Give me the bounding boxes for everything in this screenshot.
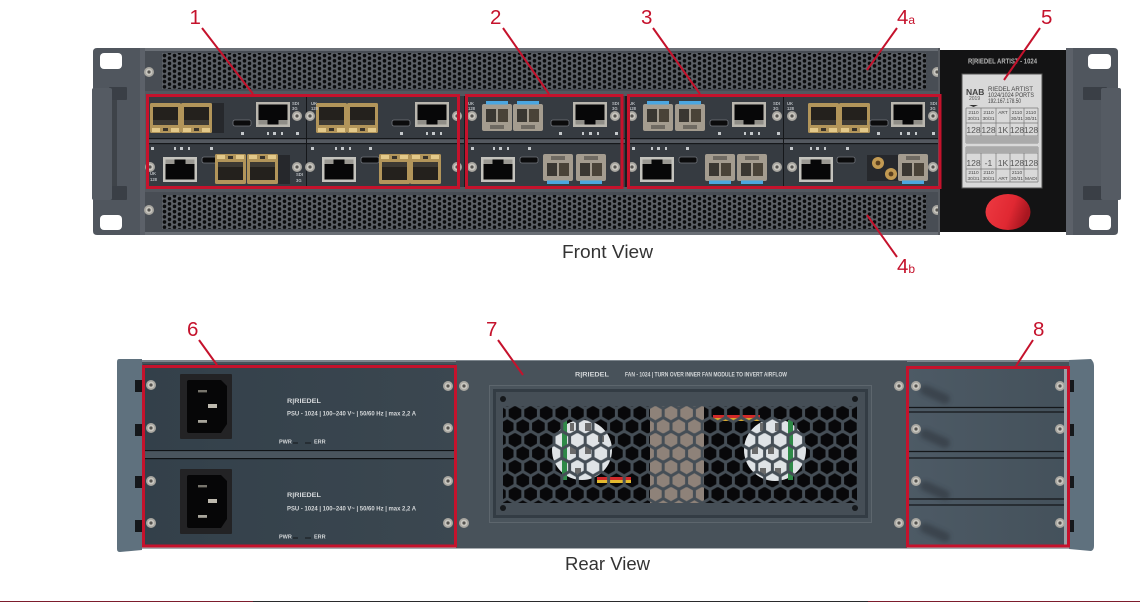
PSU 2 labels bbox=[279, 492, 416, 540]
number 1 with leader: 1 bbox=[190, 6, 201, 29]
number 6 with leader bbox=[187, 318, 217, 365]
e-paper screen: NAB bbox=[966, 87, 984, 97]
e-paper screen: 128 bbox=[966, 158, 981, 168]
bottom edge rule bbox=[0, 601, 1140, 602]
module 2: fibre LC modules: UK bbox=[468, 101, 474, 106]
e-paper screen: ART bbox=[998, 176, 1008, 182]
PSU 2 labels: PSU - 1024 | 100–240 V~ | 50/60 Hz | max 2,2 A bbox=[287, 506, 416, 512]
e-paper screen: 128 bbox=[966, 125, 981, 135]
right fan bbox=[713, 415, 806, 481]
right rack bracket bbox=[1066, 48, 1121, 235]
number 3 with leader bbox=[641, 6, 700, 94]
module 3: fibre and mixed modules bbox=[627, 101, 938, 184]
number 4a with leader bbox=[867, 6, 915, 70]
e-paper screen: 30/31 bbox=[982, 116, 995, 122]
rear view chassis bbox=[117, 359, 1094, 552]
module 3: fibre and mixed modules: 3G bbox=[930, 106, 936, 111]
number 7 with leader: 7 bbox=[486, 318, 497, 341]
number 4b with leader: 4b bbox=[897, 255, 915, 278]
red box: callout 3 bbox=[628, 96, 940, 188]
e-paper screen: 128 bbox=[1024, 125, 1038, 135]
module bay bbox=[145, 91, 940, 192]
e-paper screen: 128 bbox=[1010, 125, 1024, 135]
top ventilation grille bbox=[162, 53, 926, 89]
status LEDs bbox=[151, 132, 935, 150]
rear body bbox=[142, 360, 1069, 548]
caption: rear view: Rear View bbox=[565, 553, 651, 574]
fan panel bbox=[456, 361, 907, 548]
e-paper screen: MADI bbox=[1025, 176, 1037, 182]
left rear bracket bbox=[117, 359, 142, 552]
e-paper screen: 2110 bbox=[983, 110, 994, 116]
e-paper screen: 2019 bbox=[969, 96, 980, 102]
module 1: gold SFP modules: 3G bbox=[292, 106, 298, 111]
e-paper screen: 2110 bbox=[1012, 170, 1022, 176]
module 1: gold SFP modules bbox=[145, 101, 462, 184]
PSU 1 labels: R|RIEDEL bbox=[287, 398, 321, 405]
power inlet bottom bbox=[180, 469, 232, 534]
PSU 1 labels: PWR bbox=[279, 440, 292, 446]
number 5 with leader: 5 bbox=[1041, 6, 1052, 29]
PSU 2 labels: ERR bbox=[314, 534, 326, 540]
e-paper screen bbox=[962, 74, 1042, 188]
right rear bracket bbox=[1069, 359, 1094, 551]
number 6 with leader: 6 bbox=[187, 318, 198, 341]
e-paper screen: 1K bbox=[998, 125, 1009, 135]
number 7 with leader bbox=[486, 318, 523, 375]
PSU 1 labels: ERR bbox=[314, 440, 326, 446]
module 2: fibre LC modules: SDI bbox=[612, 101, 619, 106]
e-paper screen: 192.167.178.50 bbox=[988, 99, 1022, 105]
module 3: fibre and mixed modules: 128 bbox=[629, 106, 637, 111]
blank slot covers bbox=[908, 366, 1067, 547]
number 8 with leader: 8 bbox=[1033, 318, 1044, 341]
chassis screws bbox=[144, 67, 942, 215]
e-paper screen: 2110 bbox=[968, 110, 979, 116]
number 5 with leader bbox=[1004, 6, 1052, 80]
fan grille with fans bbox=[500, 404, 860, 505]
number 4a with leader: 4a bbox=[897, 6, 915, 29]
e-paper screen: ART bbox=[998, 110, 1008, 116]
e-paper screen: 30/31 bbox=[967, 116, 980, 122]
e-paper screen: 128 bbox=[1024, 158, 1038, 168]
e-paper screen: 1K bbox=[998, 158, 1009, 168]
fan label: FAN - 1024 | TURN OVER INNER FAN MODULE TO INVERT AIRFLOW bbox=[625, 372, 788, 378]
module 1: gold SFP modules: UK bbox=[150, 171, 156, 176]
caption: front view: Front View bbox=[562, 241, 654, 262]
number 3 with leader: 3 bbox=[641, 6, 652, 29]
red knob bbox=[986, 194, 1030, 230]
number 1 with leader bbox=[190, 6, 253, 94]
front view chassis bbox=[92, 48, 1121, 235]
e-paper screen: 2110 bbox=[1012, 110, 1022, 116]
fan label bbox=[575, 372, 788, 378]
e-paper screen: RIEDEL ARTIST bbox=[988, 87, 1033, 93]
red box: callout 1 bbox=[148, 96, 458, 188]
e-paper screen: 30/31 bbox=[1011, 116, 1023, 122]
left fan bbox=[552, 420, 631, 483]
module 1: gold SFP modules: SDI bbox=[292, 101, 299, 106]
e-paper screen: 30/31 bbox=[1011, 176, 1023, 182]
e-paper screen: 30/31 bbox=[967, 176, 980, 182]
PSU 1 labels bbox=[279, 398, 416, 446]
module 3: fibre and mixed modules: SDI bbox=[773, 101, 780, 106]
module 1: gold SFP modules: SDI bbox=[296, 172, 303, 177]
red box: callout 2 bbox=[466, 96, 622, 188]
module 3: fibre and mixed modules: 3G bbox=[773, 106, 779, 111]
power supply panels bbox=[143, 364, 456, 547]
left rack bracket bbox=[92, 48, 146, 235]
number 2 with leader bbox=[490, 6, 549, 94]
e-paper screen: 2110 bbox=[968, 170, 979, 176]
module 1: gold SFP modules: 128 bbox=[311, 106, 319, 111]
e-paper screen: 2110 bbox=[1026, 110, 1036, 116]
e-paper screen: 2110 bbox=[983, 170, 994, 176]
module 1: gold SFP modules: 3G bbox=[296, 178, 302, 183]
PSU 1 labels: PSU - 1024 | 100–240 V~ | 50/60 Hz | max 2,2 A bbox=[287, 410, 416, 418]
module 3: fibre and mixed modules: UK bbox=[787, 101, 793, 106]
e-paper screen: 30/31 bbox=[982, 176, 995, 182]
module 1: gold SFP modules: UK bbox=[311, 101, 317, 106]
red box: callout 8 bbox=[908, 368, 1068, 546]
PSU 2 labels: PWR bbox=[279, 534, 292, 540]
red box: callout 6 bbox=[144, 366, 456, 546]
PSU 2 labels: R|RIEDEL bbox=[287, 492, 321, 499]
bottom ventilation grille bbox=[162, 195, 926, 229]
e-paper screen: 30/31 bbox=[1025, 116, 1037, 122]
number 2 with leader: 2 bbox=[490, 6, 501, 29]
module 2: fibre LC modules: 128 bbox=[468, 106, 476, 111]
module 2: fibre LC modules: 3G bbox=[612, 106, 618, 111]
number 4b with leader bbox=[867, 215, 915, 278]
module 2: fibre LC modules bbox=[467, 101, 620, 184]
e-paper screen: 1024/1024 PORTS bbox=[988, 93, 1034, 99]
module 1: gold SFP modules: 128 bbox=[150, 177, 158, 182]
bracket tabs bbox=[135, 380, 1074, 532]
module 3: fibre and mixed modules: 128 bbox=[787, 106, 795, 111]
module 3: fibre and mixed modules: SDI bbox=[930, 101, 937, 106]
e-paper screen: 128 bbox=[981, 125, 996, 135]
panel brand: R|RIEDEL ARTIST - 1024 bbox=[968, 58, 1037, 66]
chassis body bbox=[145, 48, 940, 235]
display panel bbox=[938, 48, 1066, 235]
rear screws bbox=[146, 380, 1065, 528]
e-paper screen: 128 bbox=[1010, 158, 1024, 168]
module 3: fibre and mixed modules: UK bbox=[629, 101, 635, 106]
fan label: R|RIEDEL bbox=[575, 372, 609, 378]
power inlet top bbox=[180, 374, 232, 439]
number 8 with leader bbox=[1016, 318, 1044, 366]
e-paper screen: -1 bbox=[985, 158, 993, 168]
